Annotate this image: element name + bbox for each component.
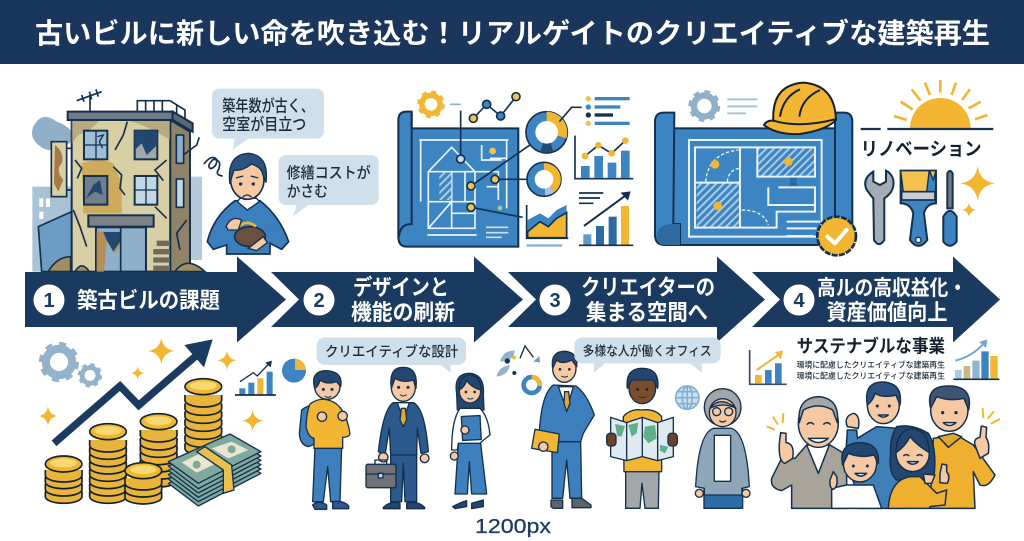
- callout: repair costs: 修繕コストが: [287, 164, 371, 182]
- icon: pie chart: [282, 359, 306, 383]
- text block: environmentally conscious: 環境に配慮したクリエイティブな建築再生: [797, 370, 945, 380]
- icon: grey gear: [690, 92, 718, 120]
- text block: environmentally conscious: 環境に配慮したクリエイティブな建築再生: [797, 360, 945, 370]
- floor plan sheet: [655, 113, 852, 245]
- callout: diverse office: [574, 337, 721, 373]
- icon: dizzy swirl: [204, 157, 223, 176]
- arrow 2: design and function: デザインと: [353, 275, 449, 300]
- sparkles: [38, 338, 263, 431]
- person: man in suit with briefcase: [366, 367, 429, 509]
- illustration: blueprint with charts: [398, 92, 633, 247]
- icon: screwdriver: [943, 171, 957, 246]
- arrow 2: design and function: 機能の刷新: [351, 300, 455, 325]
- group: diverse people in the office: [497, 337, 750, 508]
- icon: city growth chart: [953, 339, 999, 379]
- icon: check badge: [817, 217, 856, 255]
- heading: sustainable business: サステナブルな事業: [797, 335, 945, 356]
- group: sustainable business: [750, 335, 999, 508]
- arrow 3: space for creators: 集まる空間へ: [586, 300, 708, 325]
- icon: gold gear: [419, 92, 443, 117]
- donut chart large: [526, 107, 582, 153]
- arrow 4: higher returns and asset value: 4: [793, 290, 805, 312]
- arrow 4: higher returns and asset value: 資産価値向上: [826, 300, 948, 325]
- line chart icon: [469, 93, 520, 122]
- arrow 3: space for creators: 3: [549, 290, 561, 312]
- arrow 4: higher returns and asset value: [752, 256, 1000, 342]
- arrow 2: design and function: [271, 256, 523, 342]
- blueprint sheet: [398, 112, 518, 247]
- donut chart small: [527, 162, 561, 196]
- person: child: [830, 443, 882, 508]
- coin stacks: [45, 379, 222, 504]
- world map: [611, 417, 673, 461]
- person: woman with tablet: [450, 373, 490, 509]
- icon: globe: [676, 386, 699, 409]
- person: older woman in cardigan: [695, 389, 750, 508]
- bar and line chart: [575, 136, 633, 179]
- arrow 3: space for creators: [508, 256, 765, 342]
- person: man holding map: [607, 368, 677, 508]
- callout: diverse office: 多様な人が働くオフィス: [583, 343, 712, 359]
- growth arrow: [54, 339, 213, 443]
- person: girl: [888, 426, 949, 508]
- icon: paint brush: [901, 170, 936, 246]
- person: student with backpack: [299, 371, 350, 509]
- person: older man: [771, 397, 847, 508]
- arrow 4: higher returns and asset value: 高ルの高収益化・: [817, 277, 967, 300]
- legend list: [586, 96, 630, 126]
- arrow 3: space for creators: クリエイターの: [581, 275, 715, 300]
- illustration: dilapidated building: [32, 89, 205, 272]
- callout: old building, vacancies: 築年数が古く、: [222, 95, 314, 115]
- callout: creative design: クリエイティブな設計: [325, 343, 458, 359]
- arrow 1: issues of old buildings: [25, 256, 286, 342]
- area chart: [527, 205, 568, 247]
- cash bundle: [168, 434, 261, 506]
- icon: small bar chart: [235, 361, 276, 395]
- callout: old building, vacancies: [212, 89, 324, 150]
- icon: gears: [41, 344, 101, 386]
- illustration: worried owner with wallet: [204, 153, 289, 254]
- heading: renovation: リノベーション: [861, 138, 982, 159]
- callout: repair costs: かさむ: [287, 184, 328, 201]
- person: man in yellow: [930, 386, 995, 508]
- callout: creative design: [317, 337, 466, 373]
- title banner: 古いビルに新しい命を吹き込む！リアルゲイトのクリエイティブな建築再生: [35, 17, 990, 49]
- arrow 1: issues of old buildings: 1: [43, 290, 55, 312]
- person: man in blue suit with folder: [532, 351, 594, 508]
- icon: hard hat: [764, 83, 836, 134]
- arrow 2: design and function: 2: [313, 290, 325, 312]
- person: boy in blue: [846, 382, 903, 508]
- small data icons: [497, 346, 540, 393]
- callout: old building, vacancies: 空室が目立つ: [222, 114, 306, 134]
- arrow 1: issues of old buildings: 築古ビルの課題: [77, 288, 220, 313]
- callout: repair costs: [279, 155, 379, 216]
- icon: sparkles: [960, 166, 995, 217]
- icon: left bar chart: [750, 350, 787, 384]
- text block: environmentally conscious: [797, 360, 945, 380]
- group: creative design team: [299, 337, 490, 509]
- caption: image width: 1200px: [475, 516, 551, 538]
- family group thumbs up: [771, 382, 995, 508]
- icon: cheer ticks: [767, 409, 999, 429]
- illustration: coins, cash and growth arrow: [38, 338, 263, 506]
- growth bars with arrow: [579, 191, 633, 245]
- icon: rising sun: [861, 80, 993, 129]
- illustration: floor plan with hard hat: [655, 80, 995, 255]
- icon: wrench: [865, 171, 894, 244]
- title banner: [0, 0, 1024, 64]
- briefcase: [366, 460, 396, 488]
